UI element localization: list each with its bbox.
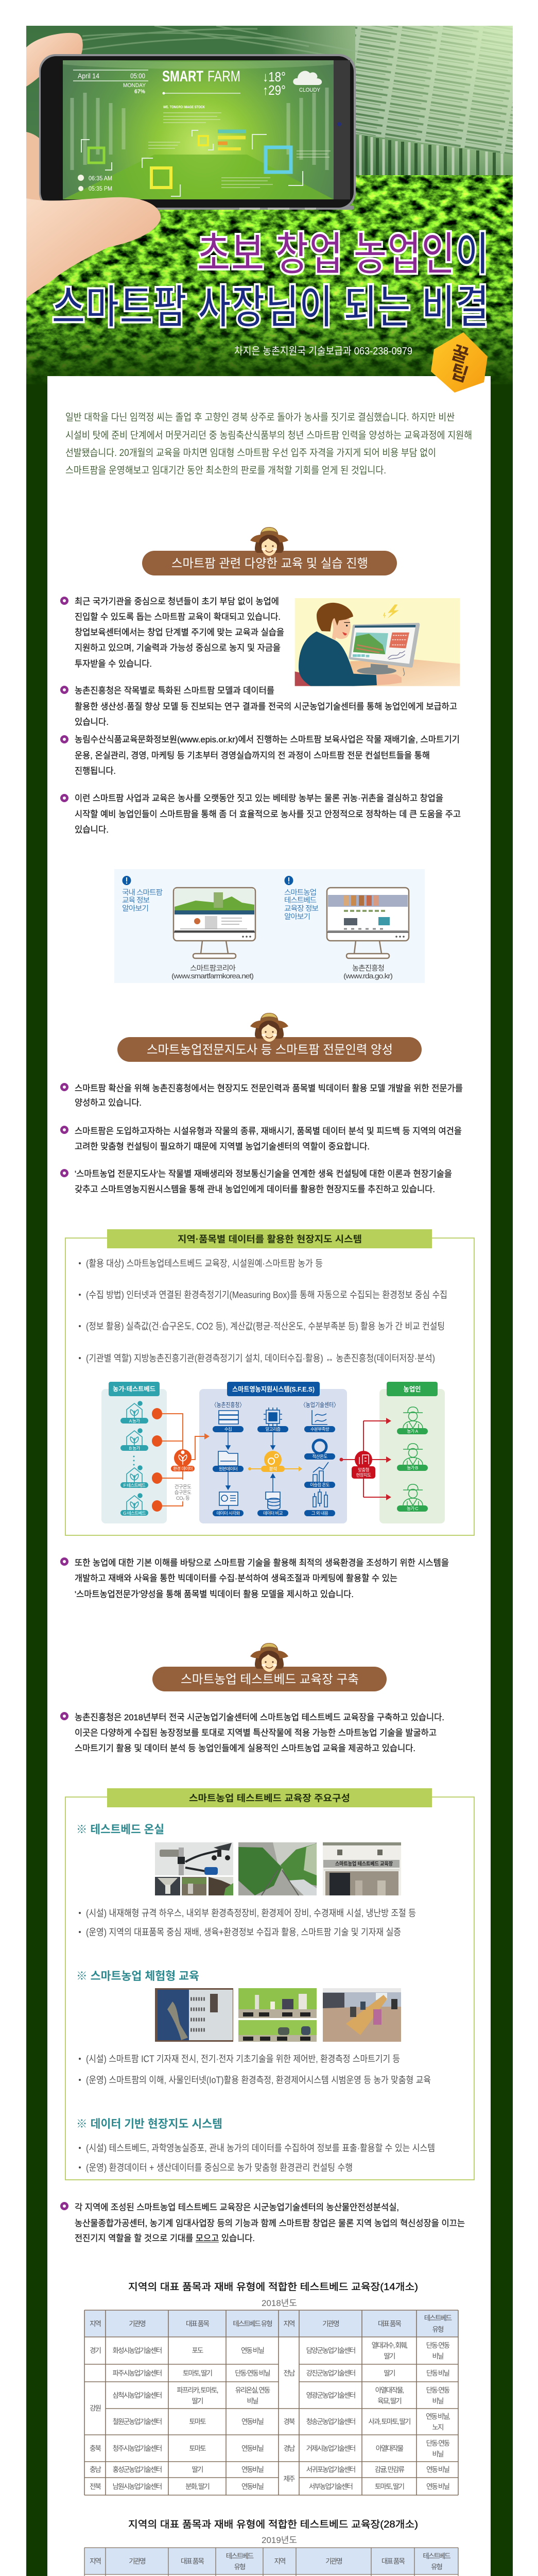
screen text: stock notes xyxy=(148,106,331,188)
diagram column: farmers: 농가 C xyxy=(407,1506,418,1511)
table rows 2018: 아열대작물 xyxy=(376,2445,404,2452)
bullet text 4 xyxy=(62,793,461,835)
panel list: (활용 대상) 스마트농업테스트베드 교육장, 시설원예·스마트팜 농가 등 xyxy=(86,1258,323,1268)
phone screen: smart farm dashboard xyxy=(63,60,334,199)
bullet text 2: 있습니다. xyxy=(75,717,109,727)
list: greenhouse: (시설) 내재해형 규격 하우스, 내외부 환경측정장비, 환경제어 장비, 수경재배 시설, 냉난방 조절 등 xyxy=(86,1908,416,1919)
website 2: 농촌진흥청: (www.rda.go.kr) xyxy=(343,972,392,980)
photo: greenhouse crop rows xyxy=(238,1842,317,1895)
table rows 2018: 단동·연동 xyxy=(426,2439,450,2447)
table title: 2019 xyxy=(128,2519,418,2545)
bullet text 9: 농촌진흥청은 2018년부터 전국 시군농업기술센터에 스마트농업 테스트베드 교육장을 구축하고 있습니다. xyxy=(75,1713,444,1722)
table rows 2018: 영광군농업기술센터 xyxy=(306,2392,355,2399)
panel list: (정보 활용) 실측값(건·습구온도, CO2 등), 계산값(평균·적산온도, 수분부족분 등) 활용 농가 간 비교 컨설팅 xyxy=(86,1321,445,1331)
table rows 2018: 파주시농업기술센터 xyxy=(113,2369,162,2377)
table rows 2018: 강진군농업기술센터 xyxy=(306,2369,355,2377)
connector: on-site guidance: 맞춤형 xyxy=(358,1467,369,1472)
section heading 3 xyxy=(152,1643,387,1691)
table title: 2018: 지역의 대표 품목과 재배 유형에 적합한 테스트베드 교육장(14개소) xyxy=(128,2281,418,2293)
table rows 2018: 담양군농업기술센터 xyxy=(306,2347,355,2354)
table rows 2018: 토마토, 딸기 xyxy=(375,2483,404,2490)
table rows 2018: 화성시농업기술센터 xyxy=(113,2347,162,2354)
bullet text 5: 스마트팜 확산을 위해 농촌진흥청에서는 현장지도 전문인력과 품목별 빅데이터 활용 모델 개발을 위한 전문가를 xyxy=(75,1083,463,1093)
table: 2019 testbed sites xyxy=(84,2548,458,2576)
section heading 2: 스마트농업전문지도사 등 스마트팜 전문인력 양성 xyxy=(147,1043,393,1057)
table header 2018: 테스트베드 유형 xyxy=(233,2320,272,2328)
table rows 2018: 단동 비닐 xyxy=(426,2369,449,2377)
table rows 2018: 전남 xyxy=(283,2369,295,2377)
bullet text 10: 농산물종합가공센터, 농기계 임대사업장 등의 기능과 함께 스마트팜 창업은 물론 지역 농업의 혁신성장을 이끄는 xyxy=(75,2218,465,2228)
table rows 2018: 연동 비닐 xyxy=(426,2466,449,2473)
screen text: SMART FARM xyxy=(163,71,240,81)
bullet text 1: 창업보육센터에서는 창업 단계별 주기에 맞는 교육과 실습을 xyxy=(75,628,284,637)
badge: 꿀팁 tip tag xyxy=(431,332,488,393)
table rows 2018: 경남 xyxy=(283,2445,295,2452)
screen text: sunrise and sunset: 06:35 AM xyxy=(89,175,112,182)
hand: rear fingers xyxy=(26,33,83,201)
subheading: data-based system: ※ 데이터 기반 현장지도 시스템 xyxy=(76,2117,222,2130)
panel: data-based field guidance system xyxy=(65,1229,474,1535)
connector: environment data collection: 습구온도 xyxy=(175,1490,192,1496)
byline: 차지은 농촌지원국 기술보급과 063-238-0979 xyxy=(234,345,412,357)
list: hands-on education: (시설) 스마트팜 ICT 기자재 전시, 전기·전자 기초기술을 위한 제어반, 환경측정 스마트기기 등 xyxy=(86,2054,400,2064)
title xyxy=(51,229,489,333)
table rows 2018: 경기 xyxy=(90,2347,100,2354)
table rows 2018: 청송군농업기술센터 xyxy=(306,2418,355,2426)
table title: 2019: 지역의 대표 품목과 재배 유형에 적합한 테스트베드 교육장(28개소) xyxy=(128,2519,418,2530)
table header 2019: 대표 품목 xyxy=(381,2557,405,2565)
table grid 2018 xyxy=(84,2310,458,2495)
bullet text 7 xyxy=(62,1169,452,1194)
photo: weather station xyxy=(155,1842,233,1895)
table rows 2018: 유리온실, 연동 xyxy=(235,2386,270,2394)
panel heading xyxy=(107,1788,432,1807)
bullet text 5 xyxy=(62,1083,463,1108)
SFES icons xyxy=(218,1408,328,1510)
website 1: 스마트팜코리아: 교육 정보 xyxy=(122,896,150,904)
table rows 2018: 단동·연동 xyxy=(426,2342,450,2349)
screen text: date xyxy=(78,73,146,93)
table rows 2018: 연동비닐 xyxy=(241,2466,264,2473)
website 1: 스마트팜코리아: 국내 스마트팜 xyxy=(122,888,163,896)
table header 2018: 유형 xyxy=(432,2326,443,2333)
table rows 2018: 딸기 xyxy=(192,2397,203,2405)
table header 2019: 테스트베드 xyxy=(423,2552,450,2560)
bullet text 10: 각 지역에 조성된 스마트농업 테스트베드 교육장은 시군농업기술센터의 농산물안전성분석실, xyxy=(75,2202,399,2212)
list: data-based system: (운영) 환경데이터 + 생산데이터를 중심으로 농가 맞춤형 환경관리 컨설팅 수행 xyxy=(86,2163,353,2173)
diagram column: SFES xyxy=(199,1382,347,1523)
section heading 1: 스마트팜 관련 다양한 교육 및 실습 진행 xyxy=(171,556,368,571)
diagram column: farm testbeds: F 테스트베드 xyxy=(124,1483,146,1488)
diagram column: farm testbeds: B 농가 xyxy=(129,1446,140,1451)
bullet text 2: 농촌진흥청은 작목별로 특화된 스마트팜 모델과 데이터를 xyxy=(75,686,274,696)
screen text: SMART FARM: FARM xyxy=(207,68,240,85)
table rows 2018: 홍성군농업기술센터 xyxy=(113,2466,162,2473)
screen text: stock notes: WE. TONGRO IMAGE STOCK xyxy=(163,106,205,109)
table header 2019: 테스트베드 xyxy=(226,2552,254,2560)
table rows 2018: 연동 비닐 xyxy=(241,2347,264,2354)
diagram column: SFES: 〈농업기술센터〉 xyxy=(301,1401,339,1409)
table rows 2018: 삼척시농업기술센터 xyxy=(113,2392,162,2399)
website 2: 농촌진흥청 xyxy=(284,876,409,980)
bullet text 1: 투자받을 수 있습니다. xyxy=(75,659,152,669)
SFES labels: 이슬점 온도 xyxy=(310,1482,330,1487)
list: hands-on education xyxy=(79,2054,431,2086)
table rows 2018: 딸기 xyxy=(192,2466,203,2473)
table rows 2018: 비닐 xyxy=(432,2450,444,2458)
connector: environment data collection: 건구온도 xyxy=(175,1484,192,1490)
table header 2019: 기관명 xyxy=(129,2557,145,2565)
table rows 2018: 열대과수, 회훼, xyxy=(372,2342,407,2349)
website 2: 농촌진흥청: 교육장 정보 xyxy=(284,904,319,912)
website 2: 농촌진흥청: 농촌진흥청 xyxy=(352,964,384,972)
list: greenhouse xyxy=(79,1908,416,1937)
table title: 2019: 2019년도 xyxy=(262,2535,297,2545)
bullet text 4: 이런 스마트팜 사업과 교육은 농사를 오랫동안 짓고 있는 베테랑 농부는 물론 귀농·귀촌을 결심하고 창업을 xyxy=(75,793,443,803)
table rows 2018: 서귀포농업기술센터 xyxy=(306,2466,355,2473)
list: greenhouse: (운영) 지역의 대표품목 중심 재배, 생육+환경정보 수집과 활용, 스마트팜 기술 및 기자재 실증 xyxy=(86,1927,401,1937)
screen text: date: 05:00 xyxy=(130,72,145,80)
table rows 2018: 연동비닐 xyxy=(241,2445,264,2452)
SFES labels xyxy=(213,1426,335,1516)
section heading 2 xyxy=(117,1013,422,1062)
flow diagram xyxy=(101,1382,445,1523)
panel: testbed main components xyxy=(65,1788,474,2180)
panel heading: 지역·품목별 데이터를 활용한 현장지도 시스템 xyxy=(178,1234,362,1245)
title: 초보 창업 농업인이 xyxy=(197,229,489,280)
list: data-based system xyxy=(79,2143,435,2173)
diagram column: SFES: 〈농촌진흥청〉 xyxy=(212,1401,245,1409)
screen brackets and tag frames xyxy=(81,130,303,196)
table header 2018 xyxy=(90,2314,452,2333)
website 1: 스마트팜코리아 xyxy=(122,876,255,980)
bullet text 8: 개발하고 재배와 사육을 통한 빅데이터를 수집·분석하여 생육조절과 마케팅에 활용할 수 있는 xyxy=(75,1573,397,1583)
diagram column: farmers: 농가 A xyxy=(407,1429,419,1434)
table rows 2018 xyxy=(90,2342,450,2490)
table header 2018: 지역 xyxy=(283,2320,294,2328)
table title: 2018 xyxy=(128,2281,418,2308)
website 1: 스마트팜코리아: (www.smartfarmkorea.net) xyxy=(171,972,253,980)
table: 2018 testbed sites xyxy=(84,2310,458,2495)
website 2: 농촌진흥청: 스마트농업 xyxy=(284,888,316,896)
intro paragraph: 선발됐습니다. 20개월의 교육을 마치면 임대형 스마트팜 우선 입주 자격을 가지게 되어 비용 부담 없이 xyxy=(65,447,436,459)
SFES labels: 수집 xyxy=(224,1427,232,1432)
bullet text 10 xyxy=(62,2202,465,2243)
table rows 2018: 토마토, 딸기 xyxy=(183,2369,212,2377)
table rows 2018: 비닐 xyxy=(432,2397,444,2405)
table rows 2018: 포도 xyxy=(192,2347,203,2354)
table rows 2018: 사과, 토마토, 딸기 xyxy=(368,2418,410,2426)
table header 2019: 유형 xyxy=(431,2563,442,2571)
bullet text 5: 양성하고 있습니다. xyxy=(75,1098,142,1108)
table header 2019: 지역 xyxy=(274,2557,285,2565)
table rows 2018: 파프리카, 토마토, xyxy=(177,2386,218,2394)
bullet text 1 xyxy=(62,597,284,669)
photo: testbed building: 스마트농업 테스트베드 교육장 xyxy=(335,1860,393,1867)
SFES labels: 그 외 내용 xyxy=(311,1511,328,1516)
table rows 2018: 감귤, 만감류 xyxy=(375,2466,405,2473)
hand: thumb over phone xyxy=(26,197,161,299)
bullet text 7: '스마트농업 전문지도사'는 작물별 재배생리와 정보통신기술을 연계한 생육 컨설팅에 대한 이론과 현장기술을 xyxy=(75,1169,452,1179)
badge: 꿀팁 tip tag: 꿀 xyxy=(449,342,472,367)
screen text: temperature and weather: ↑29° xyxy=(263,82,286,98)
table header 2018: 테스트베드 xyxy=(424,2314,452,2322)
bullet text 1: 최근 국가기관을 중심으로 청년들이 초기 부담 없이 농업에 xyxy=(75,597,279,606)
panel list: (기관별 역할) 지방농촌진흥기관(환경측정기기 설치, 데이터수집·활용) ↔ 농촌진흥청(데이터저장·분석) xyxy=(86,1353,435,1363)
photo: control screen xyxy=(155,1988,233,2042)
section heading 3: 스마트농업 테스트베드 교육장 구축 xyxy=(181,1672,359,1687)
subheading: testbed greenhouse: ※ 테스트베드 온실 xyxy=(76,1823,164,1836)
diagram column: farmers: 농업인 xyxy=(404,1385,421,1393)
table header 2018: 기관명 xyxy=(322,2320,339,2328)
table rows 2018: 단동·연동 비닐 xyxy=(235,2369,270,2377)
table header 2018: 기관명 xyxy=(129,2320,145,2328)
bullet text 8 xyxy=(62,1558,449,1599)
website 1: 스마트팜코리아: 스마트팜코리아 xyxy=(190,964,236,972)
bullet text 9: 이곳은 다양하게 수집된 농장정보를 토대로 지역별 특산작물에 적용 가능한 스마트농업 기술을 발굴하고 xyxy=(75,1728,437,1738)
intro paragraph: 시설비 탓에 준비 단계에서 머뭇거리던 중 농림축산식품부의 청년 스마트팜 인력을 양성하는 교육과정에 지원해 xyxy=(65,430,472,441)
SFES labels: 데이터 시각화 xyxy=(216,1511,240,1516)
analysis gear: 분석 xyxy=(269,1466,276,1471)
list: data-based system: (시설) 테스트베드, 과학영농실증포, 관내 농가의 데이터를 수집하여 정보를 표출·활용할 수 있는 시스템 xyxy=(86,2143,435,2154)
panel heading xyxy=(107,1229,432,1248)
bullet text 6: 스마트팜은 도입하고자하는 시설유형과 작물의 종류, 재배시기, 품목별 데이터 분석 및 피드백 등 지역의 여건을 xyxy=(75,1126,462,1136)
diagram column: farmers: 농가 B xyxy=(407,1465,419,1470)
white content panel xyxy=(47,376,491,2576)
table header 2018: 대표 품목 xyxy=(378,2320,401,2328)
table title: 2018: 2018년도 xyxy=(262,2298,297,2308)
bullet text 8: '스마트농업전문가'양성을 통해 품목별 빅데이터 활용 모델을 제시하고 있습니다. xyxy=(75,1589,354,1599)
table rows 2018: 딸기 xyxy=(384,2369,395,2377)
diagram column: SFES: 스마트영농지원시스템(S.F.E.S) xyxy=(232,1385,315,1393)
table rows 2018: 서부농업기술센터 xyxy=(309,2483,353,2490)
screen text: date: April 14 xyxy=(78,72,99,80)
panel: website links xyxy=(114,869,425,983)
diagram column: farm testbeds: 농가·테스트베드 xyxy=(113,1385,155,1393)
table header 2019: 지역 xyxy=(90,2557,100,2565)
table rows 2018: 비닐 xyxy=(247,2397,258,2405)
table header 2019: 대표 품목 xyxy=(181,2557,204,2565)
bullet text 9 xyxy=(62,1713,444,1753)
connector: environment data collection: 환경 데이터 xyxy=(173,1466,193,1471)
screen text: date: MONDAY xyxy=(123,82,146,89)
photo: classroom xyxy=(323,1988,401,2042)
table rows 2018: 철원군농업기술센터 xyxy=(113,2418,162,2426)
side frame: dark green border xyxy=(26,376,513,2576)
panel list: (수집 방법) 인터넷과 연결된 환경측정기기(Measuring Box)를 통해 자동으로 수집되는 환경정보 중심 수집 xyxy=(86,1290,447,1300)
bullet text 1: 진입할 수 있도록 돕는 스마트팜 교육이 확대되고 있습니다. xyxy=(75,612,281,622)
illustration: man at monitor xyxy=(295,598,460,686)
table rows 2018: 딸기 xyxy=(384,2352,395,2360)
table grid 2019 xyxy=(84,2548,458,2576)
table rows 2018: 연동비닐 xyxy=(241,2483,264,2490)
analysis gear xyxy=(248,1451,302,1472)
bullet text 9: 스마트기기 활용 및 데이터 분석 등 농업인들에게 실용적인 스마트농업 교육을 제공하고 있습니다. xyxy=(75,1743,415,1753)
table rows 2018: 비닐 xyxy=(432,2352,444,2360)
greenhouse background xyxy=(26,26,513,175)
subheading: hands-on education: ※ 스마트농업 체험형 교육 xyxy=(76,1970,199,1982)
website 2: 농촌진흥청: 알아보기 xyxy=(284,912,310,921)
screen text: SMART FARM: SMART xyxy=(162,68,203,85)
badge: 꿀팁 tip tag: 팁 xyxy=(448,361,471,386)
bullet text 4: 시작할 예비 농업인들이 스마트팜을 통해 좀 더 효율적으로 농사를 짓고 안정적으로 정착하는 데 큰 도움을 주고 xyxy=(75,809,461,819)
table rows 2018: 아열대작물, xyxy=(375,2386,404,2394)
table rows 2018: 경북 xyxy=(283,2418,295,2426)
table rows 2018: 전북 xyxy=(90,2483,101,2490)
table rows 2018: 단동·연동 xyxy=(426,2386,450,2394)
diagram column: farm testbeds: A 농가 xyxy=(129,1418,140,1423)
bullet text 6 xyxy=(62,1126,462,1151)
table header 2018: 대표 품목 xyxy=(186,2320,209,2328)
table rows 2018: 남원시농업기술센터 xyxy=(113,2483,162,2490)
table rows 2018: 노지 xyxy=(432,2424,443,2431)
table rows 2018: 연동비닐 xyxy=(241,2418,264,2426)
screen text: date: 67% xyxy=(134,89,145,95)
table rows 2018: 토마토 xyxy=(189,2418,206,2426)
diagram column: farm testbeds: G 테스트베드 xyxy=(123,1511,146,1516)
table rows 2018: 분화, 딸기 xyxy=(185,2483,209,2490)
SFES labels: 데이터 비교 xyxy=(263,1511,283,1516)
screen text: temperature and weather xyxy=(264,71,322,95)
table header 2018: 지역 xyxy=(90,2320,100,2328)
bullet text 8: 또한 농업에 대한 기본 이해를 바탕으로 스마트팜 기술을 활용해 최적의 생육환경을 조성하기 위한 시스템을 xyxy=(75,1558,449,1568)
bullet text 6: 고려한 맞춤형 컨설팅이 필요하기 때문에 지역별 농업기술센터의 역할이 중요합니다. xyxy=(75,1142,370,1151)
screen text: sunrise and sunset xyxy=(78,175,112,192)
table rows 2018: 강원 xyxy=(90,2404,100,2412)
smartphone xyxy=(39,54,356,210)
screen text: temperature and weather: CLOUDY xyxy=(299,87,321,93)
section heading 1 xyxy=(142,527,397,575)
table rows 2018: 연동 비닐, xyxy=(426,2413,450,2420)
list: hands-on education: (운영) 스마트팜의 이해, 사물인터넷(IoT)활용 환경측정, 환경제어시스템 시범운영 등 농가 맞춤형 교육 xyxy=(86,2075,431,2086)
connector: on-site guidance: 현장지도 xyxy=(356,1472,371,1478)
SFES labels: 알고리즘 xyxy=(266,1427,281,1432)
bullet text 4: 있습니다. xyxy=(75,825,109,835)
bullet text 3: 운용, 온실관리, 경영, 마케팅 등 기초부터 경영실습까지의 전 과정이 스마트팜 전문 컨설턴트들을 통해 xyxy=(75,751,430,760)
bullet text 10: 전진기지 역할을 할 것으로 기대를 모으고 있습니다. xyxy=(75,2233,255,2243)
website 1: 스마트팜코리아: 알아보기 xyxy=(122,904,148,912)
connector: environment data collection xyxy=(152,1408,210,1512)
table rows 2018: 연동 비닐 xyxy=(426,2483,449,2490)
foliage xyxy=(26,202,513,384)
SFES labels: 원본데이터 xyxy=(219,1466,237,1471)
SFES labels: 수분부족량 xyxy=(310,1427,329,1432)
table rows 2018: 제주 xyxy=(283,2475,295,2483)
intro paragraph: 스마트팜을 운영해보고 임대기간 동안 최소한의 판로를 개척할 기회를 얻게 된 것입니다. xyxy=(65,465,386,476)
bullet text 2: 활용한 생산성·품질 향상 모델 등 진보되는 연구 결과를 전국의 시군농업기술센터를 통해 농업인에게 보급하고 xyxy=(75,702,457,711)
screen text: temperature and weather: ↓18° xyxy=(263,69,286,84)
diagram column: farmers xyxy=(379,1382,445,1523)
bullet text 7: 갖추고 스마트영농지원시스템을 통해 관내 농업인에게 데이터를 활용한 현장지도를 추진하고 있습니다. xyxy=(75,1184,435,1194)
SFES arrows xyxy=(226,1432,275,1493)
intro paragraph xyxy=(65,412,472,476)
table rows 2018: 충북 xyxy=(90,2445,101,2452)
connector: on-site guidance xyxy=(340,1418,391,1500)
table rows 2018: 청주시농업기술센터 xyxy=(113,2445,162,2452)
screen text: sunrise and sunset: 05:35 PM xyxy=(89,185,112,192)
diagram column: farm testbeds xyxy=(101,1382,167,1523)
bullet text 3: 진행됩니다. xyxy=(75,766,116,776)
table header 2019: 유형 xyxy=(234,2563,245,2571)
table header 2019 xyxy=(90,2552,450,2571)
table rows 2018: 거제시농업기술센터 xyxy=(306,2445,355,2452)
photo: testbed building xyxy=(323,1842,401,1895)
panel list xyxy=(79,1258,447,1363)
table rows 2018: 육묘, 딸기 xyxy=(377,2397,401,2405)
bullet text 3 xyxy=(62,735,460,776)
intro paragraph: 일반 대학을 다닌 임꺽정 씨는 졸업 후 고향인 경북 상주로 돌아가 농사를 짓기로 결심했습니다. 하지만 비싼 xyxy=(65,412,455,423)
table rows 2018: 충남 xyxy=(90,2466,101,2473)
bullet text 3: 농림수산식품교육문화정보원(www.epis.or.kr)에서 진행하는 스마트팜 보육사업은 작물 재배기술, 스마트기기 xyxy=(75,735,460,744)
website 2: 농촌진흥청: 테스트베드 xyxy=(284,896,317,904)
connector: environment data collection: CO₂ 등 xyxy=(176,1496,190,1501)
photo: sensor displays xyxy=(238,1988,317,2042)
bullet text 1: 지원하고 있으며, 기술력과 가능성 중심으로 농지 및 자금을 xyxy=(75,643,281,653)
hero: greenhouse photo with phone and hand xyxy=(26,26,513,384)
panel heading: 스마트농업 테스트베드 교육장 주요구성 xyxy=(189,1793,350,1803)
SFES labels: 적산온도 xyxy=(313,1454,327,1459)
table rows 2018: 토마토 xyxy=(189,2445,206,2452)
bullet text 2 xyxy=(62,686,457,727)
table header 2019: 기관명 xyxy=(325,2557,342,2565)
